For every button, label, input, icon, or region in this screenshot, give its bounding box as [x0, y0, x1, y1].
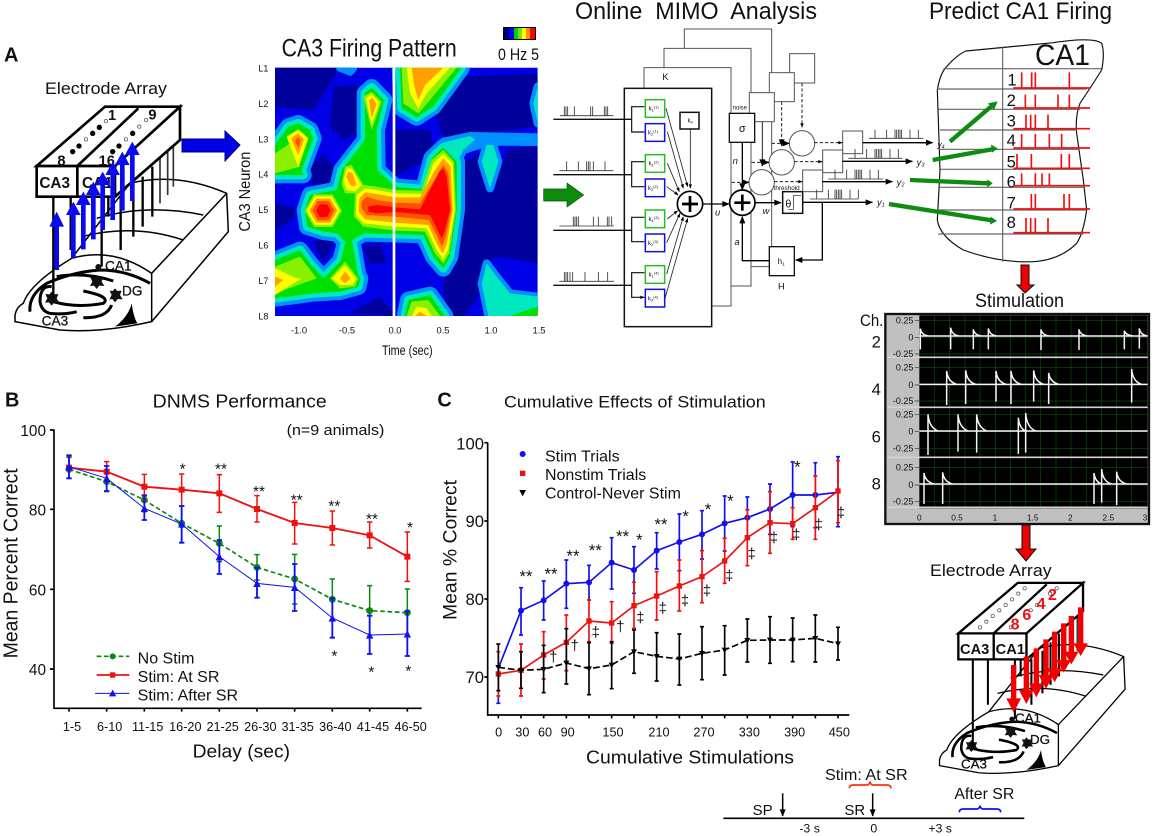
- x axis tick labels: 6-10: [97, 720, 122, 734]
- signal variable labels: y: [897, 177, 901, 187]
- channel separators: [887, 357, 1148, 507]
- legend: Stim: At SR: [138, 669, 219, 686]
- CA1 grid lines: [937, 47, 1102, 262]
- x axis tick labels: 21-25: [206, 720, 239, 734]
- hippocampus region labels: CA3: [961, 757, 987, 772]
- summation node one: [677, 191, 703, 217]
- channel labels: 6: [872, 427, 881, 446]
- red stimulation channel numbers: 8: [1011, 616, 1020, 633]
- y axis tick labels: 90: [465, 512, 484, 531]
- electrode array labels: 1: [108, 108, 116, 124]
- significance asterisks: *: [368, 664, 374, 681]
- channel numbers: 6: [1007, 173, 1016, 192]
- y axis tick labels: 100: [456, 434, 484, 453]
- legend: No Stim: [138, 651, 195, 668]
- amplitude tick labels: 0.25: [896, 362, 913, 372]
- panel letter B: B: [5, 390, 19, 412]
- dagger markers: †: [549, 650, 557, 666]
- x axis tick labels: [495, 725, 850, 739]
- kernel labels: 1: [652, 163, 655, 168]
- K label: K: [662, 72, 669, 82]
- y axis labels L1 to L8: L4: [258, 170, 268, 180]
- input spike trains: [553, 106, 644, 297]
- legend: [95, 651, 238, 704]
- heading: CA3 firing pattern: CA3 Firing Pattern: [282, 35, 457, 63]
- time axis labels: 2: [1068, 512, 1073, 522]
- array box labels: [960, 642, 1025, 658]
- electrode array labels: CA1: [82, 175, 113, 192]
- dagger markers: ‡: [815, 518, 823, 534]
- kernel labels: 2: [651, 297, 654, 302]
- dagger markers: [549, 506, 845, 666]
- hippocampus region labels: DG: [1030, 732, 1050, 747]
- legend: [519, 448, 681, 503]
- kernel labels: 2: [651, 132, 654, 137]
- array box labels: CA3: [960, 642, 989, 658]
- x axis labels: 1.5: [533, 325, 545, 335]
- amplitude tick labels: -0.25: [893, 443, 913, 453]
- significance asterisks: **: [545, 564, 558, 583]
- kernel labels: (3): [654, 215, 659, 220]
- signal variable labels: y: [877, 197, 882, 207]
- chart title: Cumulative Effects of Stimulation: [504, 393, 766, 412]
- signal variable labels: [715, 156, 925, 247]
- dagger markers: ‡: [725, 568, 733, 584]
- panel: stimulation traces: [860, 311, 1149, 524]
- after SR label and brace: After SR: [954, 786, 1014, 803]
- panel: MIMO model schematic: [544, 29, 932, 327]
- open electrode contacts: [978, 587, 1058, 629]
- dagger markers: ‡: [748, 547, 756, 563]
- x axis tick labels: 0: [495, 725, 502, 739]
- series: stim after SR: [65, 455, 411, 656]
- signal variable labels: w: [763, 206, 771, 216]
- channel labels: 2: [872, 332, 881, 351]
- feedback h1 box: h: [778, 257, 782, 266]
- kernel boxes green and blue: [645, 100, 665, 307]
- series: control never stim: [495, 615, 841, 695]
- x axis tick labels: 150: [602, 725, 624, 739]
- significance asterisks: **: [366, 512, 378, 529]
- colour scale legend: 0 Hz 5: [498, 45, 539, 64]
- channel numbers: 1: [1007, 71, 1017, 90]
- x axis tick labels: 26-30: [244, 720, 277, 734]
- timeline axis: [723, 816, 1024, 821]
- electrode array labels: 8: [57, 153, 65, 169]
- SR marker: SR: [844, 802, 865, 819]
- amplitude tick labels: 0.25: [896, 409, 913, 419]
- significance asterisks: *: [682, 507, 689, 526]
- significance asterisks: *: [636, 530, 643, 549]
- CA1 outline: [937, 40, 1103, 262]
- x axis tick labels: 36-40: [319, 720, 352, 734]
- hippocampus region labels: CA3: [42, 313, 68, 328]
- signal variable labels: y: [917, 157, 921, 167]
- amplitude tick labels: 0.25: [896, 463, 913, 473]
- green arrowheads: [987, 101, 998, 225]
- significance asterisks: *: [727, 492, 734, 511]
- CA1 title: CA1: [1035, 39, 1090, 72]
- amplitude tick labels: -0.25: [893, 497, 913, 507]
- x axis tick labels: 270: [693, 725, 715, 739]
- channel labels: 8: [872, 475, 881, 494]
- SP marker: SP: [753, 802, 773, 819]
- y axis labels L1 to L8: [258, 63, 268, 321]
- kernel labels: k: [649, 107, 652, 113]
- significance asterisks: **: [616, 527, 630, 546]
- arrow: input to MIMO: [544, 183, 584, 207]
- SP marker: [753, 793, 783, 819]
- significance asterisks: *: [794, 458, 801, 477]
- heading: electrode array: Electrode Array: [930, 561, 1052, 580]
- stim at SR label and brace: Stim: At SR: [825, 767, 908, 784]
- time axis labels: 0.5: [951, 512, 963, 522]
- channel numbers: 7: [1007, 193, 1016, 212]
- kernel labels: (1): [653, 129, 659, 134]
- amplitude tick labels: 0: [908, 480, 913, 490]
- x axis tick labels: 16-20: [169, 720, 202, 734]
- significance asterisks: *: [705, 500, 712, 519]
- time axis labels: [917, 512, 1148, 522]
- heat map contours: [275, 68, 538, 316]
- panel: predicted CA1 firing map: [889, 39, 1103, 262]
- amplitude tick labels: 0.25: [896, 316, 913, 326]
- channel numbers: 4: [1007, 131, 1016, 150]
- feedback h1 box: [769, 247, 794, 291]
- amplitude tick labels: 0: [908, 380, 913, 390]
- significance asterisks: *: [331, 648, 337, 665]
- dagger markers: ‡: [636, 611, 644, 627]
- panel: C cumulative effects chart: [437, 390, 850, 767]
- y axis tick labels: 100: [20, 423, 46, 440]
- feedback h1 box: H: [778, 281, 785, 291]
- series: stim at SR: [66, 456, 410, 581]
- signal variable labels: a: [734, 237, 740, 247]
- channel labels: [860, 311, 883, 494]
- y axis tick labels: [456, 434, 484, 687]
- time axis labels: 1: [993, 512, 998, 522]
- noise sigma box: noise: [733, 105, 748, 111]
- signal variable labels: 3: [921, 163, 925, 169]
- x axis tick labels: 11-15: [132, 720, 163, 734]
- significance asterisks: **: [589, 541, 602, 560]
- y axis labels L1 to L8: L3: [258, 134, 268, 144]
- legend: Stim Trials: [545, 448, 620, 465]
- kernel labels: (4): [654, 271, 659, 276]
- kernel labels: k: [649, 217, 652, 223]
- hippocampus region labels: [42, 259, 142, 328]
- kernel labels: k: [649, 273, 652, 279]
- y axis title: Mean % Correct: [441, 479, 462, 620]
- channel labels: 4: [872, 380, 881, 399]
- kernel labels: 2: [651, 242, 654, 247]
- array box labels: CA1: [996, 642, 1025, 658]
- dagger markers: ‡: [681, 593, 689, 609]
- red stimulation channel numbers: 4: [1037, 596, 1046, 613]
- x axis tick labels: [63, 720, 427, 734]
- significance asterisks: **: [291, 492, 303, 509]
- y axis labels L1 to L8: L7: [258, 276, 268, 286]
- time labels: -3 s: [799, 821, 820, 835]
- kernel labels: k: [648, 296, 651, 302]
- after SR label and brace: [954, 786, 1014, 812]
- channel numbers: 2: [1007, 91, 1016, 110]
- dagger markers: ‡: [703, 583, 711, 599]
- amplitude tick labels: 0: [908, 333, 913, 343]
- legend: Control-Never Stim: [545, 486, 681, 503]
- signal variable labels: u: [715, 207, 720, 217]
- electrode contact dots: [70, 118, 148, 154]
- time axis labels: 2.5: [1103, 512, 1114, 522]
- signal arrows: [703, 142, 932, 261]
- series: no stim: [66, 457, 411, 637]
- back layers: outputs: [749, 54, 863, 195]
- y axis labels L1 to L8: L2: [258, 99, 268, 109]
- kernel labels: 1: [652, 108, 655, 113]
- significance asterisks: **: [215, 462, 227, 479]
- panel: B DNMS performance chart: [0, 390, 427, 762]
- electrode array labels: CA3: [39, 175, 70, 192]
- x axis title: Delay (sec): [193, 741, 290, 762]
- kernel labels: 1: [652, 218, 655, 223]
- diagram: hippocampal slab with electrodes: [939, 583, 1125, 773]
- significance asterisks: *: [405, 663, 411, 680]
- x axis tick labels: 390: [784, 725, 805, 739]
- hippocampus region labels: CA1: [1015, 711, 1041, 726]
- trace channel 2: [919, 328, 1148, 350]
- signal variable labels: n: [733, 156, 738, 166]
- diagram: hippocampal slab with electrodes: [15, 107, 228, 331]
- electrode array labels: 9: [148, 107, 156, 123]
- dashed signal lines: [732, 83, 842, 182]
- axes: [50, 429, 422, 712]
- noise sigma box: σ: [739, 123, 746, 135]
- kernel labels: (4): [653, 294, 659, 299]
- x axis labels: -1.0: [291, 325, 307, 335]
- time labels: 0: [870, 821, 877, 835]
- hippocampus region labels: CA1: [105, 259, 132, 274]
- kernel labels: k: [648, 186, 651, 192]
- x axis tick labels: 1-5: [63, 720, 81, 734]
- y axis tick labels: 60: [29, 582, 46, 599]
- signal variable labels: 1: [882, 203, 885, 209]
- significance asterisks: **: [655, 515, 668, 534]
- kernel labels: 1: [652, 274, 655, 279]
- kernel labels: (3): [653, 239, 659, 244]
- significance asterisks: **: [520, 567, 533, 586]
- dagger markers: ‡: [770, 531, 778, 547]
- k0 box: 0: [691, 120, 694, 125]
- y axis tick labels: 80: [465, 590, 484, 609]
- channel numbers: 3: [1007, 112, 1016, 131]
- stimulus onset marker line: [390, 68, 398, 316]
- channel numbers: 8: [1007, 213, 1016, 232]
- sample size note: (n=9 animals): [287, 422, 384, 439]
- chart title: DNMS Performance: [153, 390, 327, 411]
- noise sigma box: [729, 105, 755, 142]
- kernel labels: (2): [654, 160, 659, 165]
- x axis tick labels: 330: [739, 725, 760, 739]
- x axis tick labels: 41-45: [357, 720, 389, 734]
- heading: electrode array: Electrode Array: [45, 79, 168, 98]
- hippocampus region labels: [961, 711, 1050, 772]
- trace channel 4: [919, 369, 1148, 405]
- panel letter A: A: [4, 45, 18, 67]
- SR marker: [844, 793, 873, 819]
- kernel labels: [648, 105, 659, 302]
- series: stim trials: [496, 457, 840, 703]
- channel numbers: [1007, 71, 1017, 232]
- threshold box: threshold: [774, 185, 800, 192]
- panel: A electrode array recording: [4, 45, 228, 331]
- significance asterisks: **: [567, 547, 580, 566]
- y4 output label: y: [937, 139, 942, 149]
- red stimulation arrows: [1006, 607, 1088, 713]
- x axis tick labels: 46-50: [394, 720, 427, 734]
- x axis labels: [291, 325, 545, 335]
- kernel labels: k: [648, 241, 651, 247]
- dagger markers: ‡: [792, 527, 800, 543]
- x axis tick labels: 210: [648, 725, 670, 739]
- feedback h1 box: 1: [782, 261, 785, 267]
- colour scale legend: [498, 27, 539, 64]
- threshold box: θ: [785, 198, 791, 210]
- x axis labels: -0.5: [339, 325, 355, 335]
- y4 output label: [920, 139, 945, 151]
- kernel arrows into summation: [665, 108, 690, 298]
- y axis labels L1 to L8: L1: [258, 63, 268, 73]
- channel numbers: 5: [1007, 152, 1016, 171]
- k0 box: k: [688, 119, 691, 125]
- heading: stimulation: Stimulation: [975, 291, 1064, 312]
- legend: Nonstim Trials: [545, 467, 646, 484]
- kernel labels: (1): [654, 105, 659, 110]
- time labels: +3 s: [928, 821, 952, 835]
- noise solid line: [761, 122, 764, 166]
- green arrows to CA1 channels: [889, 104, 994, 220]
- series: nonstim trials: [496, 461, 841, 696]
- dagger markers: ‡: [837, 506, 845, 522]
- time axis labels: 0: [917, 512, 922, 522]
- x axis tick labels: 450: [829, 725, 850, 739]
- red stimulation channel numbers: 6: [1022, 607, 1031, 624]
- x axis tick labels: 90: [561, 725, 575, 739]
- axes: [484, 443, 849, 718]
- k0 box: [680, 112, 699, 129]
- y axis tick labels: 40: [29, 662, 46, 679]
- y axis labels L1 to L8: L6: [258, 241, 268, 251]
- panel: CA3 firing pattern heat map: [237, 35, 545, 358]
- oscilloscope frame: [885, 314, 1149, 524]
- panel letter C: C: [437, 390, 452, 412]
- y axis tick labels: 70: [465, 668, 484, 687]
- x axis title: Cumulative Stimulations: [586, 746, 794, 767]
- red stimulation channel numbers: 2: [1048, 587, 1057, 604]
- dagger markers: ‡: [659, 601, 667, 617]
- threshold box: [774, 185, 803, 213]
- black plot area: [919, 315, 1148, 508]
- red stimulation channel numbers: [1011, 587, 1057, 633]
- kernel labels: (2): [653, 184, 659, 189]
- y axis title: CA3 Neuron: [237, 152, 254, 232]
- channel labels: Ch.: [860, 311, 883, 330]
- amplitude tick labels: -0.25: [893, 349, 913, 359]
- y axis title: Mean Percent Correct: [0, 468, 22, 658]
- signal variable labels: 2: [900, 183, 905, 189]
- x axis title: Time (sec): [382, 342, 433, 358]
- kernel labels: 2: [651, 187, 654, 192]
- legend: Stim: After SR: [138, 687, 238, 704]
- time axis labels: 1.5: [1027, 512, 1039, 522]
- x axis labels: 1.0: [485, 325, 497, 335]
- y axis labels L1 to L8: L8: [258, 311, 268, 321]
- kernel labels: k: [648, 131, 651, 137]
- trace channel 8: [919, 469, 1148, 505]
- arrow: stimulation to electrode array: [1016, 525, 1036, 561]
- green grid: [919, 315, 1148, 508]
- dagger markers: †: [571, 638, 579, 654]
- arrow: CA1 to stimulation: [1017, 265, 1034, 293]
- y4 output label: 4: [942, 145, 945, 151]
- electrode array labels: 16: [99, 153, 115, 169]
- amplitude tick labels: -0.25: [893, 396, 913, 406]
- dagger markers: ‡: [592, 625, 600, 641]
- amplitude ticks: [915, 321, 919, 502]
- significance asterisks: [180, 462, 413, 681]
- summation node two: [730, 190, 755, 215]
- x axis tick labels: 30: [515, 725, 529, 739]
- dagger markers: †: [616, 619, 624, 635]
- y axis labels L1 to L8: L5: [258, 205, 268, 215]
- hippocampus region labels: DG: [122, 284, 142, 299]
- kernel labels: k: [649, 162, 652, 168]
- output spike trains: [810, 130, 923, 199]
- amplitude tick labels: 0: [908, 427, 913, 437]
- electrode array labels: [39, 107, 156, 192]
- predicted red spike trains: [1013, 72, 1090, 233]
- arrow: electrode array to firing pattern: [182, 131, 240, 161]
- significance asterisks: *: [180, 462, 186, 479]
- panel: electrode array stimulation: [930, 561, 1125, 773]
- blue recording arrows: [49, 142, 140, 270]
- time axis labels: 3: [1143, 512, 1148, 522]
- significance asterisks: **: [253, 484, 265, 501]
- amplitude tick labels: [893, 316, 913, 507]
- x axis labels: 0.5: [437, 325, 449, 335]
- significance asterisks: **: [328, 498, 340, 515]
- y axis tick labels: 80: [29, 502, 46, 519]
- trace channel 6: [919, 413, 1148, 455]
- x axis tick labels: 60: [538, 725, 552, 739]
- x axis tick labels: 31-35: [281, 720, 314, 734]
- significance asterisks: [520, 458, 801, 586]
- main kernel box: [624, 88, 712, 327]
- significance asterisks: *: [407, 520, 413, 537]
- back layers of K box: [644, 29, 772, 306]
- panel: stimulation timeline: [723, 767, 1024, 835]
- time labels: [799, 821, 952, 835]
- y axis tick labels: [20, 423, 46, 679]
- x axis labels: 0.0: [389, 325, 401, 335]
